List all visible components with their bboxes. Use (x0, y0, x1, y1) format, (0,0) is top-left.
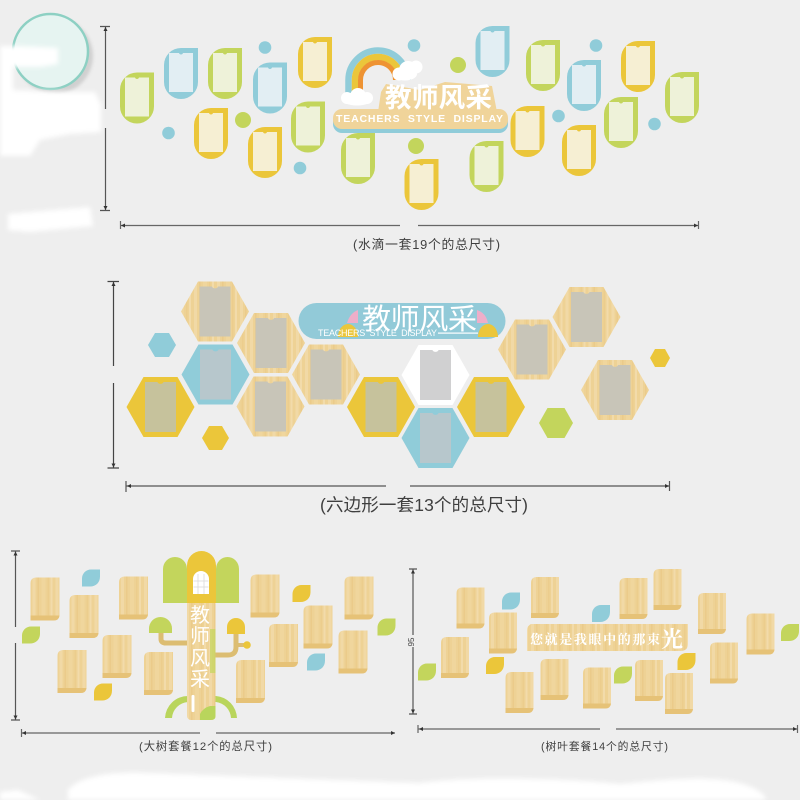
panel: hexagon set (108, 282, 670, 515)
caption: (大树套餐12个的总尺寸) (139, 739, 272, 753)
tree vertical title: 教 (190, 604, 210, 627)
width dimension (21, 729, 395, 737)
panel: leaf set (407, 569, 799, 753)
tree vertical title: 风 (190, 648, 210, 670)
leaves (418, 592, 799, 684)
height label: 95 (407, 637, 416, 646)
width dimension (126, 481, 670, 492)
small hexagons (148, 333, 670, 450)
subtitle text: TEACHERS STYLE DISPLAY (336, 113, 503, 125)
tree (149, 551, 251, 720)
tree vertical title (190, 604, 210, 691)
decorative moon circle (13, 14, 93, 94)
wood photo tiles (30, 574, 374, 703)
banner subtitle text: TEACHERS STYLE DISPLAY (318, 328, 437, 338)
height dimension (409, 569, 417, 714)
title banner (298, 303, 506, 339)
rainbow (348, 50, 408, 94)
water drop frames (120, 26, 699, 210)
caption: (树叶套餐14个的总尺寸) (541, 739, 668, 753)
tree window (193, 571, 209, 594)
quote text: 您就是我眼中的那束 (530, 632, 660, 647)
tree vertical title: 师 (190, 625, 210, 648)
height dimension (11, 551, 20, 720)
panel: big tree set (11, 551, 396, 753)
caption: (水滴一套19个的总尺寸) (353, 237, 500, 252)
height dimension (100, 26, 110, 210)
width dimension (418, 725, 798, 733)
height dimension (108, 282, 119, 468)
tree vertical title: 采 (190, 668, 210, 691)
width dimension (120, 221, 698, 229)
banner title text: 教师风采 (362, 303, 477, 336)
title text: 教师风采 (385, 83, 492, 113)
hexagon frames (126, 282, 649, 468)
quote plaque (527, 624, 688, 652)
leaves (22, 570, 396, 700)
wood photo tiles (441, 569, 774, 714)
decorative dots (162, 39, 661, 174)
clouds (341, 60, 422, 106)
title plaque (333, 82, 508, 133)
panel: water drop set (100, 26, 699, 252)
quote highlight character: 光 (661, 627, 683, 652)
caption: (六边形一套13个的总尺寸) (320, 495, 528, 515)
